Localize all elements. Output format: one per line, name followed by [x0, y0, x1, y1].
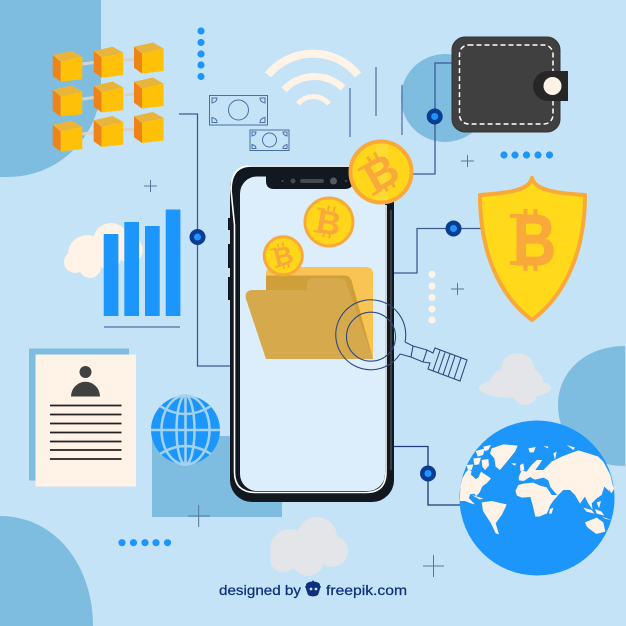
blockchain cubes: [53, 42, 164, 152]
icon: freepik logo: [305, 580, 321, 596]
attribution: [219, 580, 407, 598]
profile text lines: [50, 406, 122, 459]
phone notch: [266, 176, 353, 189]
bitcoin coin: large: B: [356, 144, 408, 202]
bitcoin coin: small: B: [270, 239, 296, 273]
background circle behind wallet: [401, 54, 489, 142]
wallet clasp: [533, 71, 568, 101]
background blob: bottom left: [0, 516, 93, 626]
vertical cream dots: [428, 271, 436, 324]
icon: small banknote: [250, 130, 289, 150]
continents: [460, 444, 614, 534]
wallet: [452, 37, 568, 132]
cloud: grey, bottom: [270, 517, 348, 576]
icon: small globe: [151, 395, 220, 465]
folder: [246, 267, 373, 359]
icon: large banknote: [210, 96, 268, 125]
cloud: grey, right: [479, 353, 551, 405]
connector node: [446, 220, 462, 236]
magnifying glass: [336, 300, 467, 381]
icon: wifi signal: [268, 54, 358, 104]
shield with bitcoin symbol: B: [513, 201, 556, 281]
world globe: [460, 420, 614, 576]
profile icon: [71, 366, 100, 396]
attribution: freepik.com: [326, 582, 407, 598]
bitcoin coin: small: [264, 237, 302, 275]
side buttons: [228, 218, 231, 300]
document card: [36, 354, 136, 486]
background square behind small globe: [152, 436, 282, 517]
plus markers: [144, 155, 474, 577]
bitcoin coin: medium: B: [314, 202, 344, 243]
vertical blue dots: [197, 27, 205, 80]
bar chart: [104, 210, 180, 327]
connector node: [420, 466, 436, 482]
horizontal blue dots: bottom left: [118, 539, 171, 546]
connector node: [427, 108, 443, 124]
connector: coin to wallet: [410, 63, 453, 174]
bitcoin coin: medium: [305, 198, 353, 246]
connector node: [190, 229, 206, 245]
document card shadow: [29, 348, 129, 480]
connector: phone to world globe: [394, 446, 461, 505]
attribution: designed by: [219, 582, 301, 598]
connector: chart line to phone: [179, 114, 230, 366]
decorative vertical lines: [350, 67, 402, 137]
horizontal blue dots: top right: [500, 151, 553, 159]
shield with bitcoin symbol: [480, 178, 585, 320]
connector: phone to shield: [394, 220, 482, 273]
phone screen: [240, 176, 385, 491]
background blob: top left: [0, 0, 101, 177]
phone: [228, 165, 394, 502]
cloud: cream, behind chart: [64, 223, 143, 278]
wallet button: [544, 77, 562, 95]
background blob: right: [558, 346, 625, 466]
